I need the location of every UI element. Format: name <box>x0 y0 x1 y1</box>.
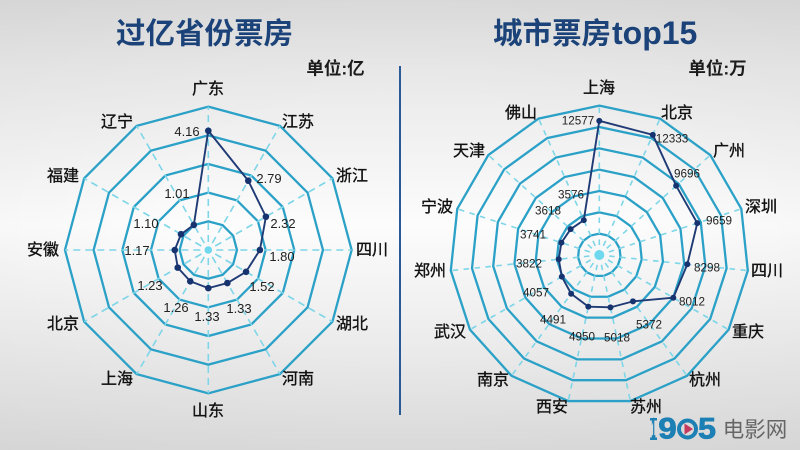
data points <box>171 127 269 291</box>
city values: 4057 <box>523 286 549 300</box>
province labels: 广东 <box>192 80 224 98</box>
title: cities: top15 <box>612 15 697 51</box>
radar chart: cities <box>414 79 783 416</box>
city labels: 重庆 <box>732 323 764 341</box>
province values: 1.80 <box>269 249 295 264</box>
province values: 2.79 <box>256 171 282 186</box>
province labels: 福建 <box>47 167 79 185</box>
city values: 3822 <box>516 258 542 270</box>
province values: 1.26 <box>163 300 189 315</box>
logo: 1905 电影网: 1 <box>652 412 656 446</box>
city labels: 北京 <box>661 104 693 122</box>
city values: 3576 <box>558 188 584 202</box>
title: cities <box>493 15 697 51</box>
city labels: 深圳 <box>745 198 777 216</box>
title: cities: 城市票房 <box>493 18 611 50</box>
city labels: 西安 <box>536 398 568 416</box>
province labels: 辽宁 <box>101 113 133 131</box>
logo: 1905 电影网: 5 <box>698 412 716 446</box>
city labels: 宁波 <box>421 198 453 216</box>
province labels <box>27 80 388 420</box>
province labels: 安徽 <box>27 241 59 259</box>
logo: 1905 电影网 <box>650 412 787 446</box>
city values: 12577 <box>562 114 594 128</box>
province values: 1.52 <box>249 279 275 294</box>
city labels: 天津 <box>453 142 485 160</box>
city labels: 苏州 <box>630 398 662 416</box>
province values <box>124 124 296 324</box>
city values: 8012 <box>679 296 705 308</box>
province labels: 浙江 <box>336 167 368 185</box>
data line <box>559 121 697 307</box>
city values: 3618 <box>535 204 561 218</box>
logo: 1905 电影网: 9 <box>658 412 677 446</box>
province values: 1.33 <box>194 309 220 324</box>
province labels: 北京 <box>47 315 79 333</box>
city labels: 郑州 <box>414 262 446 280</box>
unit label: provinces: 单位:亿 <box>306 58 365 78</box>
city values: 9659 <box>706 214 732 228</box>
rings: 7 fifteen-sided polygons <box>451 106 748 401</box>
city values: 12333 <box>656 132 688 146</box>
logo: 1905 电影网: 电影网 <box>723 418 787 442</box>
city values <box>516 114 732 344</box>
radar chart: provinces <box>27 80 388 420</box>
city labels <box>414 79 783 416</box>
rings: 5 dodecagons <box>65 107 352 393</box>
city labels: 上海 <box>583 79 615 97</box>
city labels: 武汉 <box>434 323 466 341</box>
province values: 2.32 <box>270 216 296 231</box>
city labels: 杭州 <box>689 371 721 389</box>
province labels: 湖北 <box>336 315 368 333</box>
city values: 4950 <box>569 330 595 344</box>
province labels: 河南 <box>282 370 314 388</box>
divider <box>399 66 401 415</box>
province values: 1.10 <box>133 216 159 231</box>
province values: 1.23 <box>137 278 163 293</box>
province labels: 四川 <box>356 242 388 259</box>
province labels: 江苏 <box>282 113 314 131</box>
unit label: cities: 单位:万 <box>688 58 747 78</box>
city values: 5372 <box>636 318 662 332</box>
data points <box>556 118 700 310</box>
province labels: 山东 <box>192 402 224 420</box>
city values: 3741 <box>520 228 546 242</box>
data line <box>175 131 266 288</box>
province values: 1.01 <box>164 186 190 201</box>
city values: 5018 <box>604 332 630 344</box>
title: provinces: 过亿省份票房 <box>116 18 293 50</box>
city values: 9696 <box>674 168 700 180</box>
city labels: 四川 <box>751 263 783 280</box>
province values: 4.16 <box>174 124 200 139</box>
spokes <box>65 107 352 393</box>
city labels: 广州 <box>713 142 745 160</box>
city labels: 佛山 <box>505 104 537 122</box>
city labels: 南京 <box>477 371 509 389</box>
province values: 1.17 <box>124 243 150 258</box>
province values: 1.33 <box>226 301 252 316</box>
city values: 4491 <box>540 314 566 326</box>
province labels: 上海 <box>101 370 133 388</box>
spokes <box>451 106 748 401</box>
city values: 8298 <box>694 262 720 274</box>
